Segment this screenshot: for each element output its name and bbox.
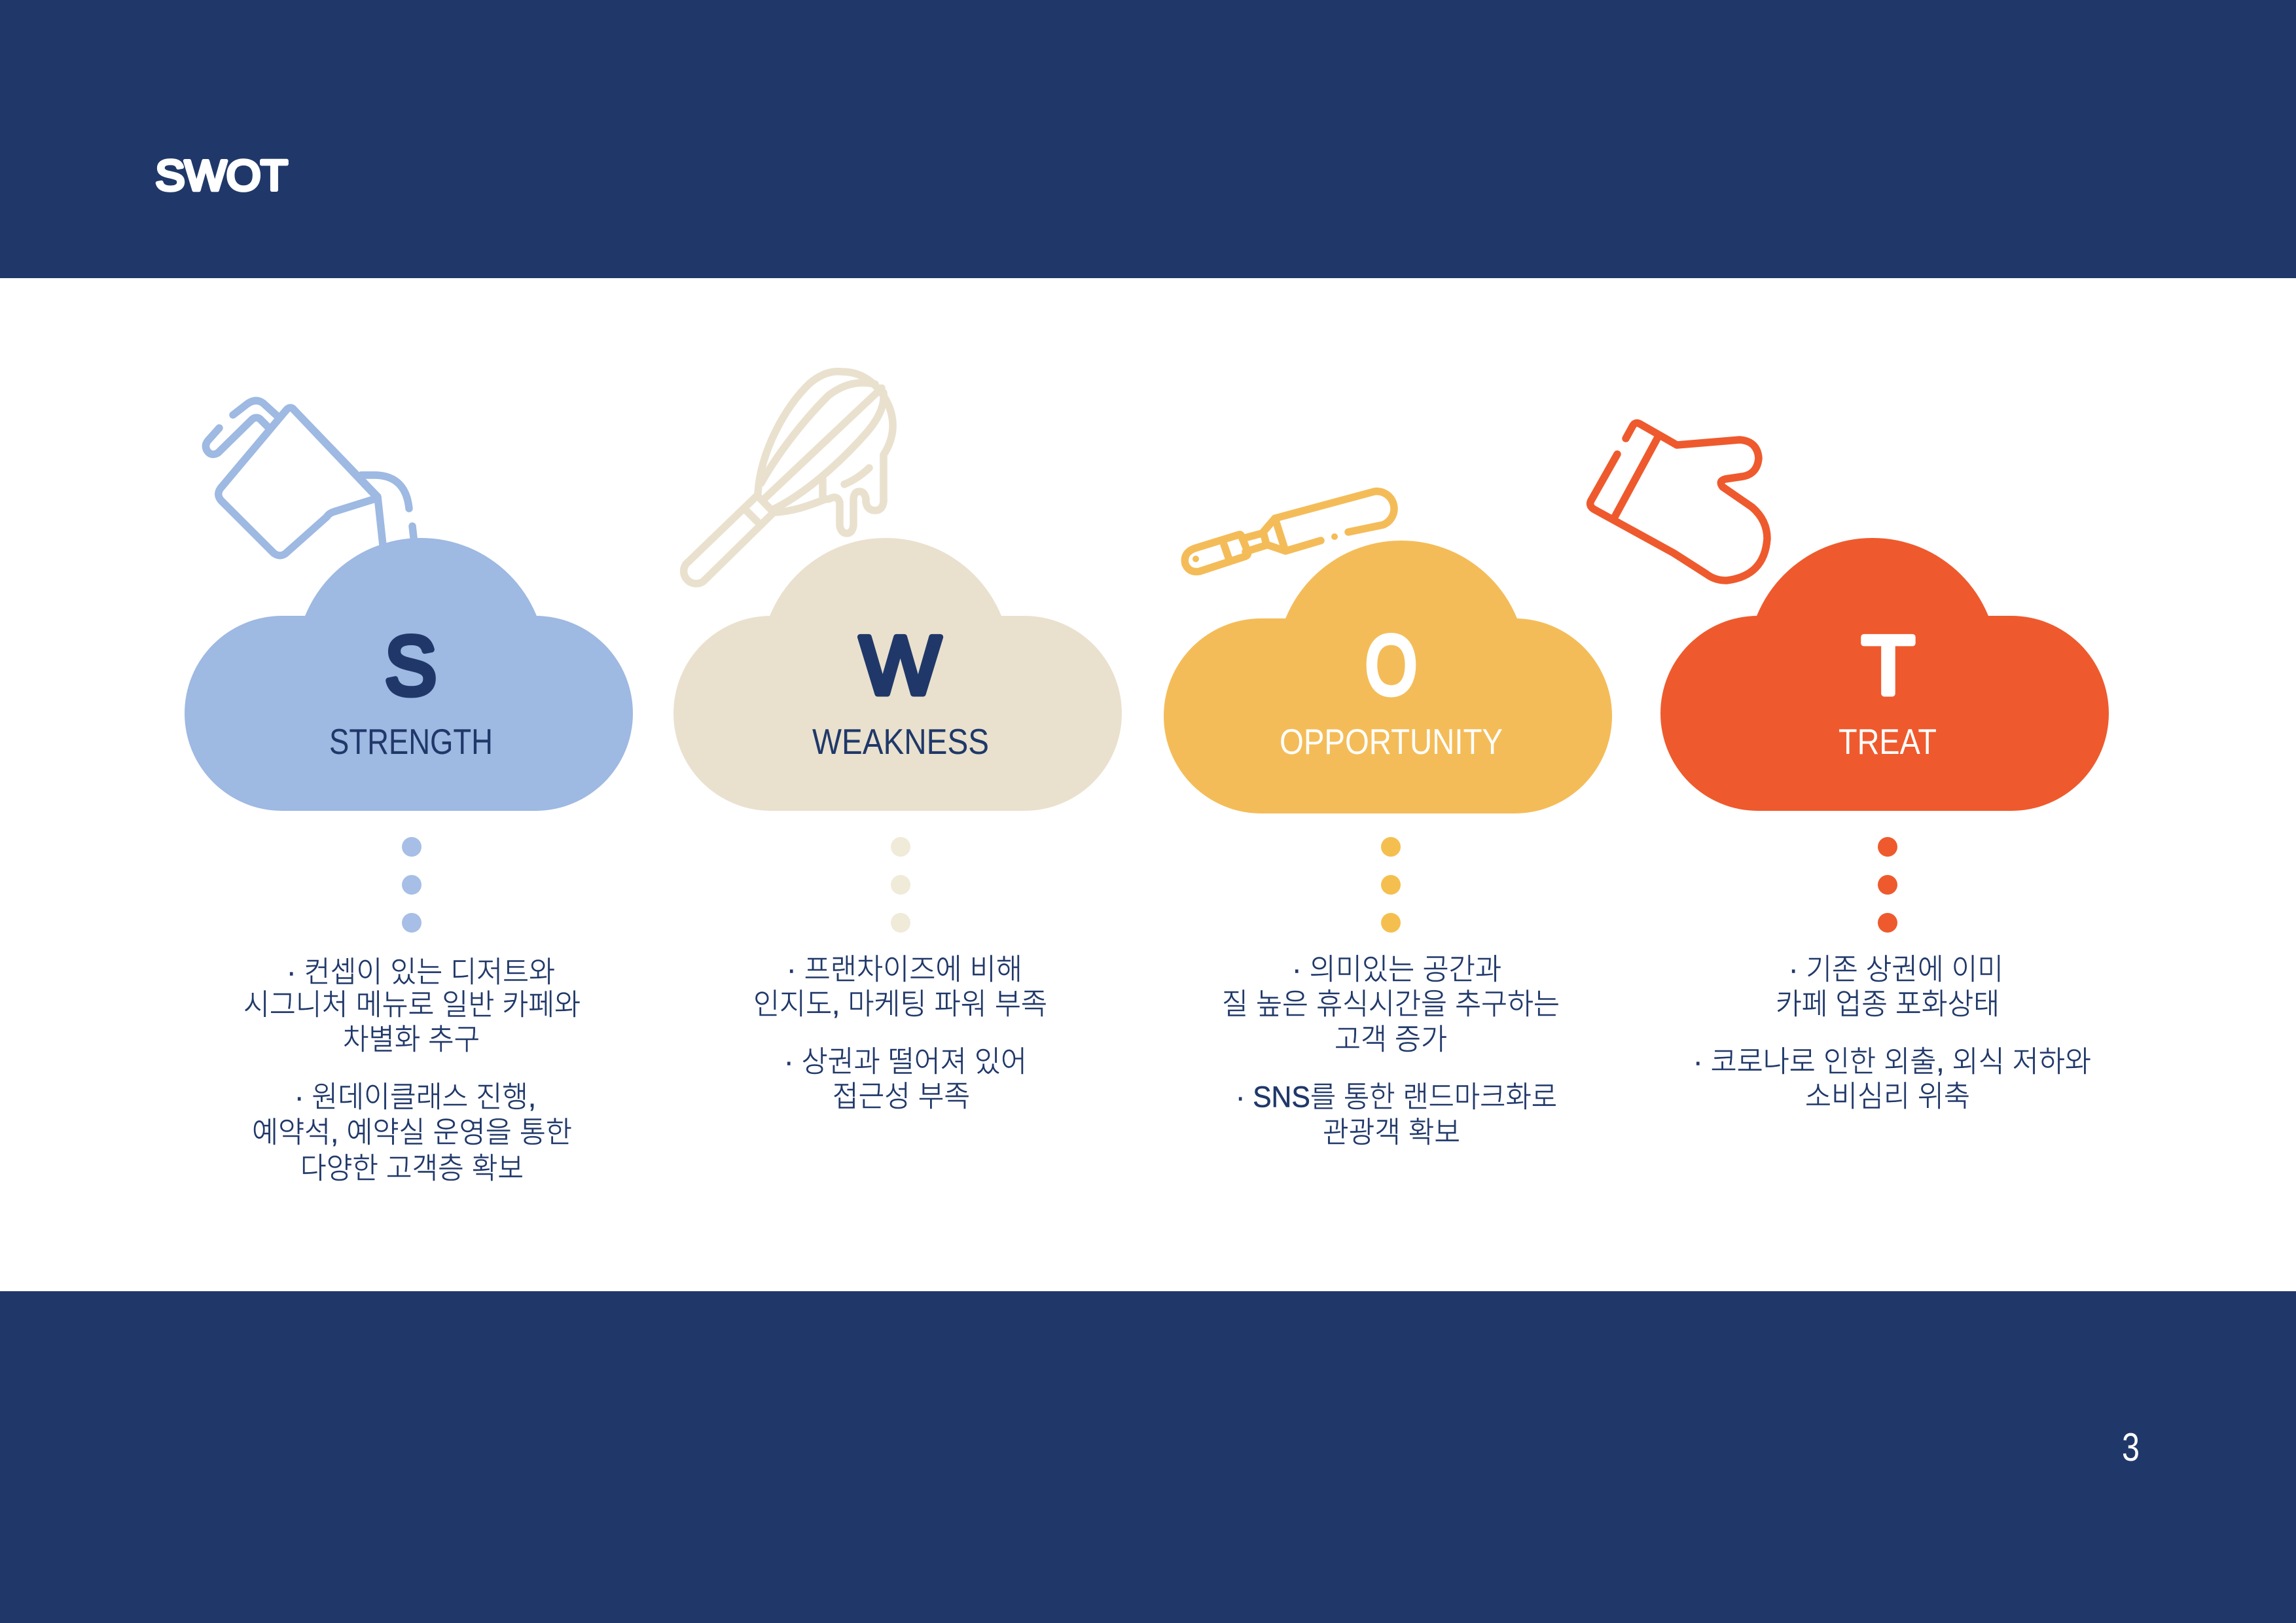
connector dots — [891, 837, 910, 933]
panel: strength — [185, 401, 633, 1185]
icon: whisk — [684, 372, 893, 584]
weakness text: 접근성 부족 — [833, 1080, 970, 1113]
weakness text: 인지도, 마케팅 파워 부족 — [753, 987, 1047, 1021]
connector dots — [1878, 837, 1897, 933]
threat text: · 코로나로 인한 외출, 외식 저하와 — [1693, 1044, 2091, 1079]
opportunity text: · 의미있는 공간과 — [1292, 953, 1501, 986]
connector dots — [402, 837, 422, 933]
label STRENGTH: STRENGTH — [329, 721, 493, 762]
strength text — [243, 955, 581, 1185]
icon: oven mitt — [1590, 423, 1767, 580]
opportunity text: 관광객 확보 — [1323, 1115, 1460, 1149]
cloud shape — [185, 538, 633, 811]
weakness text — [753, 953, 1047, 1113]
cloud shape — [1660, 538, 2109, 811]
letter S: S — [385, 620, 437, 712]
footer band — [0, 1291, 2296, 1623]
letter O: O — [1365, 619, 1416, 711]
label WEAKNESS: WEAKNESS — [812, 721, 989, 762]
opportunity text: · SNS를 통한 랜드마크화로 — [1236, 1080, 1557, 1114]
header band — [0, 0, 2296, 278]
threat text — [1693, 953, 2091, 1113]
opportunity text — [1222, 953, 1560, 1149]
letter T: T — [1862, 619, 1914, 711]
threat text: 소비심리 위축 — [1805, 1080, 1970, 1113]
connector dots — [1381, 837, 1401, 933]
strength text: 시그니처 메뉴로 일반 카페와 — [243, 988, 581, 1021]
page number: 3 — [2122, 1425, 2140, 1469]
weakness text: · 상권과 떨어져 있어 — [784, 1044, 1027, 1079]
icon dot details — [1193, 533, 1338, 562]
strength text: · 원데이클래스 진행, — [295, 1080, 536, 1114]
cloud shape — [1164, 541, 1612, 813]
panel: weakness — [673, 372, 1122, 1113]
strength text: · 컨셉이 있는 디저트와 — [287, 955, 555, 988]
label TREAT: TREAT — [1839, 721, 1937, 762]
cloud shape — [673, 538, 1122, 811]
strength text: 예약석, 예약실 운영을 통한 — [252, 1115, 572, 1149]
icon: palette knife — [1185, 491, 1394, 572]
strength text: 다양한 고객층 확보 — [300, 1152, 524, 1185]
weakness text: · 프랜차이즈에 비해 — [787, 953, 1022, 986]
panel: threat — [1590, 423, 2109, 1113]
threat text: · 기존 상권에 이미 — [1789, 953, 2003, 986]
opportunity text: 질 높은 휴식시간을 추구하는 — [1222, 987, 1560, 1021]
letter W: W — [860, 619, 941, 711]
strength text: 차별화 추구 — [343, 1022, 480, 1056]
opportunity text: 고객 증가 — [1335, 1022, 1447, 1056]
panel: opportunity — [1164, 491, 1612, 1149]
label OPPORTUNITY: OPPORTUNITY — [1280, 721, 1503, 762]
title: SWOT — [156, 152, 288, 199]
threat text: 카페 업종 포화상태 — [1776, 987, 2000, 1021]
icon: milk pitcher — [206, 401, 414, 556]
